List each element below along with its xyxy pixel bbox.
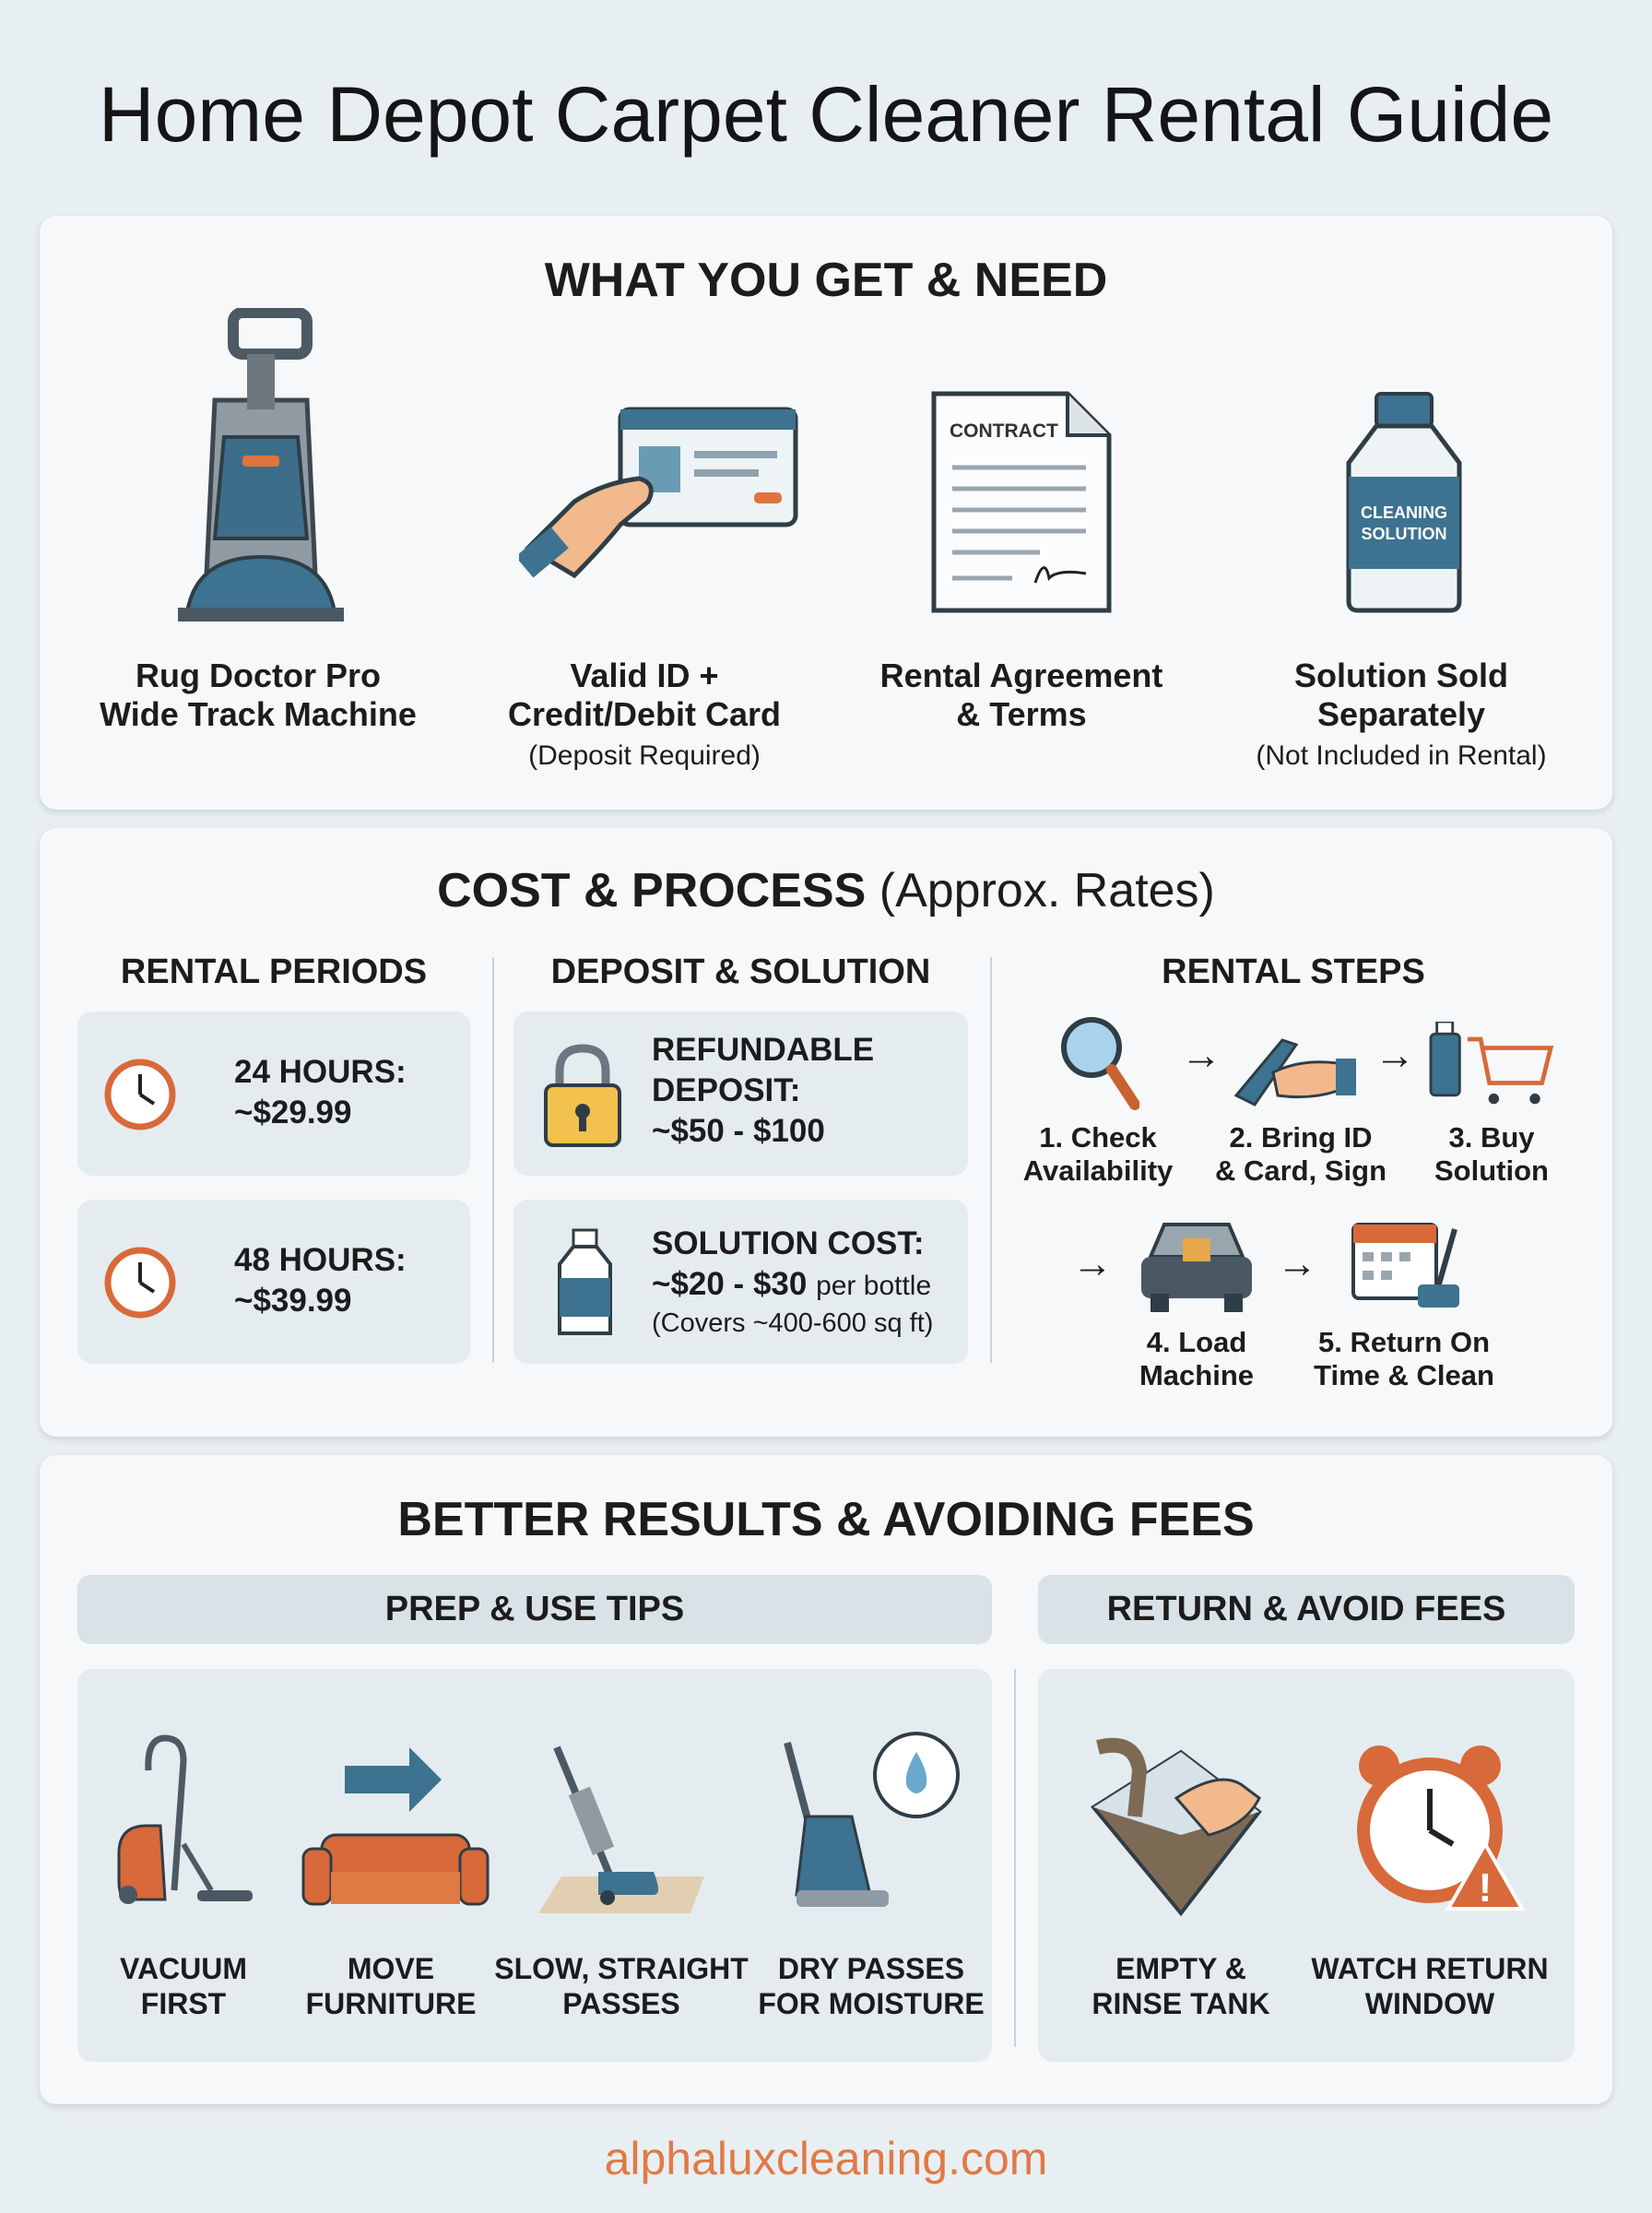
step 4: [1139, 1223, 1254, 1391]
bar: return & avoid fees: [1038, 1575, 1575, 1644]
arrow: →: [1277, 1241, 1317, 1286]
icon: contract: [931, 391, 1112, 612]
arrow: →: [1375, 1033, 1415, 1078]
arrow: →: [1181, 1033, 1221, 1078]
step 5: Time & Clean: [1314, 1359, 1494, 1391]
subheading: deposit & solution: DEPOSIT & SOLUTION: [551, 953, 930, 991]
label: solution: [1256, 657, 1547, 771]
tip: empty tank: RINSE TANK: [1092, 1987, 1270, 2020]
step 4: Machine: [1139, 1359, 1254, 1391]
heading: BETTER RESULTS & AVOIDING FEES: [397, 1493, 1255, 1546]
label: machine: [100, 657, 417, 733]
step 3: [1429, 1022, 1554, 1187]
step 2: [1215, 1038, 1386, 1187]
icon: solution bottle: SOLUTION: [1361, 525, 1447, 543]
box: deposit: ~$50 - $100: [652, 1113, 825, 1149]
step 1: [1023, 1017, 1173, 1187]
label: solution: (Not Included in Rental): [1256, 740, 1547, 771]
box: 24 hours: ~$29.99: [234, 1095, 352, 1130]
footer: website: alphaluxcleaning.com: [605, 2133, 1047, 2184]
icon: solution bottle: CLEANING: [1361, 503, 1447, 522]
tip: empty tank: [1091, 1737, 1270, 2020]
box: solution cost: [513, 1200, 968, 1364]
subheading: rental steps: RENTAL STEPS: [1162, 953, 1425, 991]
step 5: 5. Return On: [1318, 1326, 1490, 1358]
box: solution cost: ~$20 - $30 per bottle: [652, 1266, 931, 1302]
label: id: Valid ID +: [570, 657, 719, 694]
tip: watch return window: [1311, 1746, 1549, 2020]
box: 24 hours: [77, 1012, 470, 1176]
label: contract: [880, 657, 1162, 733]
panel: what you get & need: [40, 216, 1612, 810]
icon: contract: CONTRACT: [950, 420, 1058, 442]
label: solution: Solution Sold: [1294, 657, 1508, 694]
tip: slow passes: [494, 1746, 749, 2020]
step 3: 3. Buy: [1448, 1121, 1535, 1154]
box: solution cost: SOLUTION COST:: [652, 1225, 925, 1261]
box: return tips: [1038, 1669, 1575, 2062]
box: 24 hours: 24 HOURS:: [234, 1054, 407, 1090]
bar: prep & use tips: [77, 1575, 992, 1644]
tip: dry passes: [758, 1732, 985, 2020]
arrow: →: [1072, 1241, 1113, 1286]
tip: move furniture: MOVE: [348, 1952, 434, 1985]
label: solution: Separately: [1317, 695, 1485, 733]
label: contract: & Terms: [956, 695, 1087, 733]
tip: slow passes: PASSES: [562, 1987, 680, 2020]
bar: prep & use tips: PREP & USE TIPS: [385, 1590, 684, 1628]
box: deposit: REFUNDABLE: [652, 1032, 874, 1068]
bar: return & avoid fees: RETURN & AVOID FEES: [1107, 1590, 1505, 1628]
panel: cost & process: [40, 828, 1612, 1437]
step 2: 2. Bring ID: [1229, 1121, 1372, 1154]
tip: watch return window: WINDOW: [1365, 1987, 1494, 2020]
box: 48 hours: [77, 1200, 470, 1364]
tip: vacuum: FIRST: [141, 1987, 226, 2020]
label: machine: Wide Track Machine: [100, 695, 417, 733]
label: contract: Rental Agreement: [880, 657, 1162, 694]
tip: watch return window: WATCH RETURN: [1311, 1952, 1549, 1985]
heading: WHAT YOU GET & NEED: [545, 254, 1107, 307]
box: deposit: DEPOSIT:: [652, 1072, 800, 1108]
panel: better results: [40, 1455, 1612, 2104]
box: deposit: [513, 1012, 968, 1176]
tip: vacuum: [118, 1735, 253, 2020]
box: 48 hours: 48 HOURS:: [234, 1242, 407, 1278]
label: id: Credit/Debit Card: [508, 695, 781, 733]
box: 48 hours: ~$39.99: [234, 1283, 352, 1319]
tip: move furniture: [302, 1747, 489, 2020]
box: prep tips: [77, 1669, 992, 2062]
step 3: Solution: [1434, 1154, 1549, 1187]
label: id: (Deposit Required): [528, 740, 761, 771]
step 2: & Card, Sign: [1215, 1154, 1386, 1187]
icon: id card: [519, 408, 798, 579]
tip: empty tank: EMPTY &: [1115, 1952, 1246, 1985]
tip: slow passes: SLOW, STRAIGHT: [494, 1952, 749, 1985]
icon: carpet cleaner machine: [178, 308, 344, 621]
tip: vacuum: VACUUM: [120, 1952, 247, 1985]
box: solution cost: (Covers ~400-600 sq ft): [652, 1308, 933, 1338]
label: id: [508, 657, 781, 771]
subheading: rental periods: RENTAL PERIODS: [121, 953, 427, 991]
heading: COST & PROCESS (Approx. Rates): [437, 864, 1215, 917]
tip: dry passes: FOR MOISTURE: [758, 1987, 985, 2020]
step 1: Availability: [1023, 1154, 1173, 1187]
label: machine: Rug Doctor Pro: [136, 657, 381, 694]
tip: move furniture: FURNITURE: [306, 1987, 476, 2020]
step 1: 1. Check: [1039, 1121, 1157, 1154]
title: Home Depot Carpet Cleaner Rental Guide: [99, 71, 1553, 158]
step 4: 4. Load: [1147, 1326, 1246, 1358]
tip: watch return window: !: [1479, 1865, 1492, 1911]
step 5: [1314, 1223, 1494, 1391]
icon: solution bottle: [1346, 392, 1462, 612]
tip: dry passes: DRY PASSES: [778, 1952, 964, 1985]
